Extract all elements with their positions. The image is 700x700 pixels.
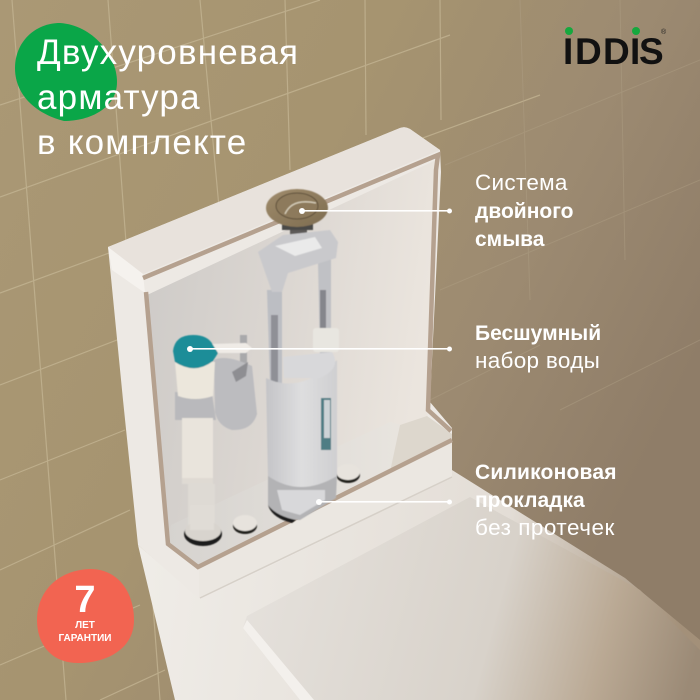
warranty badge: ГАРАНТИИ [59, 633, 111, 644]
top bracket [258, 230, 338, 292]
green blob [15, 23, 117, 121]
logo: IDDIS [563, 31, 664, 72]
label: silicone gasket [475, 461, 617, 540]
spring clip [313, 328, 339, 352]
toilet lower body [138, 470, 700, 700]
callout line: button [299, 208, 452, 214]
tube upper [182, 418, 213, 480]
tank front wall [199, 442, 452, 598]
rubber plugs [233, 464, 360, 534]
title [37, 33, 299, 162]
label: dual flush system [475, 170, 574, 251]
grey clip [175, 392, 216, 420]
title: в комплекте [37, 123, 247, 162]
seat lid [243, 497, 700, 700]
label: silicone gasket: Силиконовая [475, 461, 617, 484]
callout line: gasket [316, 499, 452, 505]
label: silent filling [475, 322, 601, 373]
label: dual flush system: Система [475, 170, 568, 195]
title: арматура [37, 78, 201, 117]
grey float cup [214, 358, 257, 430]
flush valve [258, 189, 339, 523]
tank outer shell [108, 127, 452, 599]
right guide rail [318, 258, 331, 358]
fill valve stem [240, 335, 247, 365]
tank interior floor [168, 422, 450, 566]
label: silent filling: набор воды [475, 348, 600, 373]
callout line: fill valve [187, 346, 452, 352]
dual flush button [266, 189, 328, 227]
tank interior back wall [147, 160, 436, 564]
toilet cistern [108, 127, 700, 700]
teal cap [173, 335, 218, 368]
warranty badge: 7 [74, 579, 96, 621]
label: silicone gasket: без протечек [475, 515, 615, 540]
fill valve [173, 335, 257, 546]
left guide rail [267, 290, 282, 385]
base ring [184, 522, 222, 546]
label: silent filling: Бесшумный [475, 322, 601, 345]
title: Двухуровневая [37, 33, 299, 72]
logo: ® [661, 28, 667, 36]
cylinder [266, 360, 337, 489]
label: dual flush system: двойного [475, 200, 574, 223]
fill valve arm [210, 343, 252, 353]
tank right wall top [390, 416, 452, 472]
tank inner brown edge [143, 155, 452, 567]
push button stem [290, 225, 307, 251]
grey base cage [268, 476, 337, 520]
tube lower [188, 484, 215, 526]
warranty badge [37, 569, 134, 663]
label: dual flush system: смыва [475, 228, 545, 251]
white valve body [175, 362, 215, 399]
label: silicone gasket: прокладка [475, 489, 585, 512]
warranty badge: ЛЕТ [75, 620, 95, 631]
